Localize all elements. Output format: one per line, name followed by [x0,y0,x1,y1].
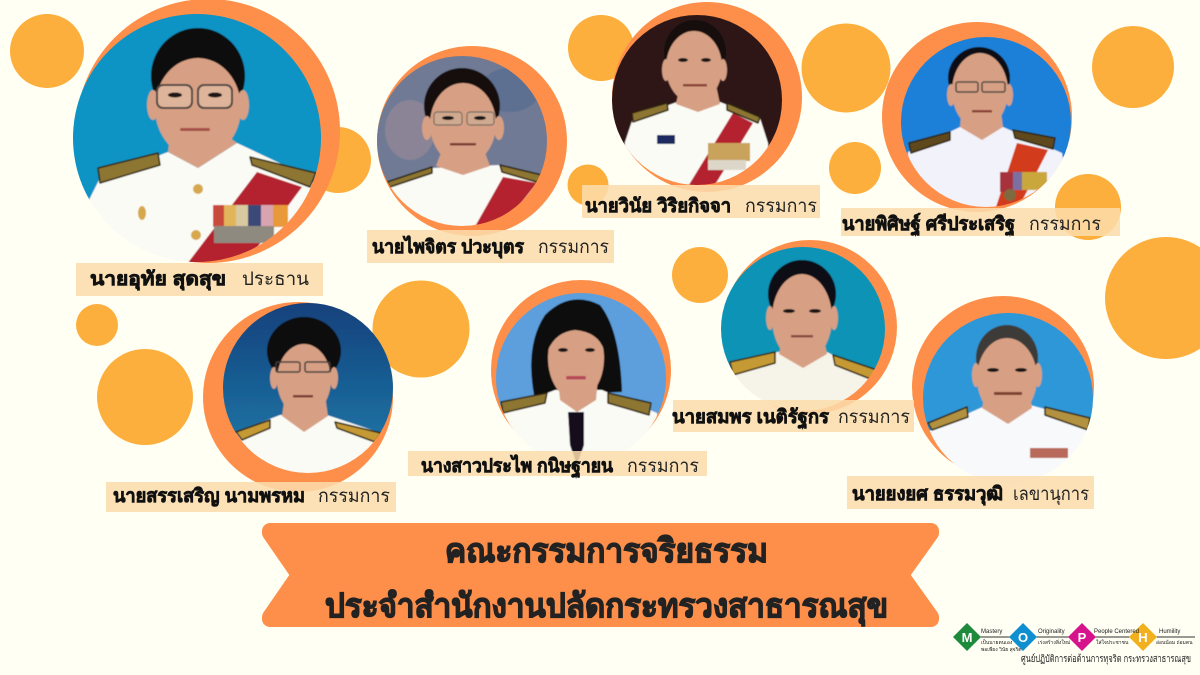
diamond H [1129,623,1157,651]
label: member 5: นายสรรเสริญ นามพรหม [113,486,305,507]
title banner [270,531,931,627]
label: member 2: นายไพจิตร ปวะบุตร [372,235,525,259]
portrait: secretary [912,296,1094,465]
label: member 5: กรรมการ [318,486,390,507]
label: chairman [76,263,323,296]
label: member 3 [582,185,820,218]
portrait: committee member 6 [491,280,671,466]
label: member 3: กรรมการ [745,196,817,217]
label: secretary [847,476,1094,509]
logo keywords: เป็นนายตนเอง [981,638,1013,646]
label: chairman: ประธาน [242,269,309,290]
label: member 4: กรรมการ [1029,214,1101,235]
logo keywords: Humility [1159,629,1180,635]
diamond H: H [1138,630,1148,645]
label: member 6: กรรมการ [627,456,699,477]
portrait: chairman [70,0,340,266]
label: member 2: กรรมการ [538,237,609,258]
diamond O [1009,623,1037,651]
label: member 4 [841,208,1120,237]
portrait: committee member 2 [375,46,567,236]
logo keywords: อ่อนน้อม ถ่อมตน [1156,639,1193,646]
logo keywords: ใส่ใจประชาชน [1096,639,1129,646]
portrait: committee member 7 [719,240,897,414]
logo keywords: Originality [1038,629,1065,635]
logo keywords: Mastery [981,629,1002,635]
label: member 4: นายพิศิษฐ์ ศรีประเสริฐ [842,213,1015,237]
portrait: committee member 3 [610,2,802,192]
label: member 7 [672,400,914,432]
logo keywords: เร่งสร้างสิ่งใหม่ [1038,639,1070,646]
label: member 5 [106,482,396,512]
decorative orange circles [10,14,1200,445]
label: secretary: เลขานุการ [1013,484,1089,506]
diamond P: P [1078,630,1087,645]
portrait: committee member 4 [882,22,1074,212]
logo keywords: People Centered [1094,629,1139,635]
diamond M: M [962,630,972,645]
label: member 6: นางสาวประไพ กนิษฐายน [421,454,613,479]
label: member 7: นายสมพร เนติรัฐกร [672,407,830,430]
logo keywords: พอเพียง วินัย สุจริต [981,646,1022,653]
logo keywords [981,629,1193,653]
label: member 6 [408,451,707,479]
label: secretary: นายยงยศ ธรรมวุฒิ [852,484,1003,506]
label: member 3: นายวินัย วิริยกิจจา [585,196,731,217]
portrait: committee member 5 [203,300,396,492]
title line 1: คณะกรรมการจริยธรรม [445,532,768,569]
MOPH logo [953,623,1195,665]
diamond M [953,623,981,651]
diamond O: O [1018,630,1028,645]
label: member 2 [367,230,614,263]
title line 2: ประจำสำนักงานปลัดกระทรวงสาธารณสุข [325,587,888,627]
diamond P [1068,623,1096,651]
label: member 7: กรรมการ [838,407,910,428]
label: chairman: นายอุทัย สุดสุข [90,269,226,291]
